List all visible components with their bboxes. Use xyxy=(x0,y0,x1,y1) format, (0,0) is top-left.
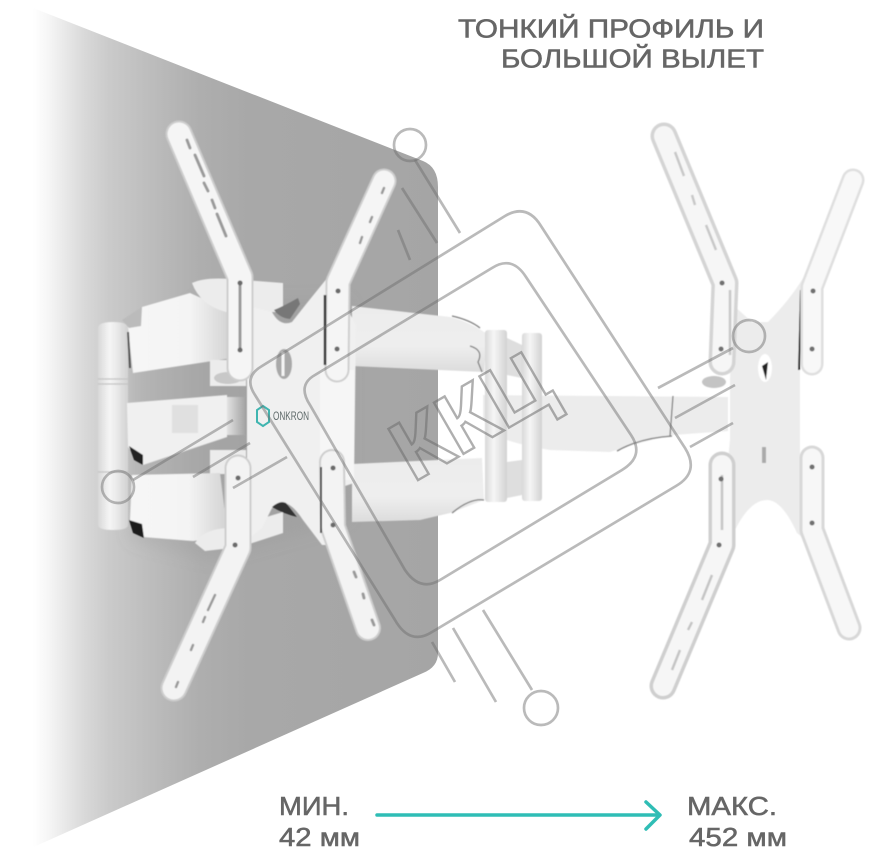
wall panel xyxy=(0,0,438,856)
upper right bracket face xyxy=(337,181,384,370)
lower right bracket face right xyxy=(812,458,849,628)
upper left slots right xyxy=(675,152,730,355)
upper folded segment xyxy=(128,293,232,373)
upper left bracket slots xyxy=(187,140,240,350)
lower left bracket face right xyxy=(663,465,722,686)
arrow: min to max xyxy=(377,802,660,829)
metal joint xyxy=(227,397,248,435)
lower right bracket face xyxy=(332,462,368,628)
lower right bracket holes xyxy=(354,572,374,625)
right wall plate xyxy=(727,275,812,542)
upper left bracket face xyxy=(179,134,240,368)
middle folded segment xyxy=(127,395,227,465)
right plate lower fold edge xyxy=(801,460,802,525)
stamp outer frame xyxy=(250,211,691,637)
minimum label xyxy=(279,791,360,852)
right plate screw xyxy=(762,447,766,463)
upper right bracket dark edge xyxy=(324,295,326,365)
swivel support upper xyxy=(210,360,246,386)
upper segment recess xyxy=(122,307,142,328)
middle segment dark recess xyxy=(129,446,143,465)
upper segment dark edge xyxy=(128,332,130,368)
swivel support lower xyxy=(210,450,246,474)
plate slot bottom xyxy=(272,502,297,517)
left mount bolts xyxy=(235,283,338,545)
pin left xyxy=(102,420,287,503)
lower swivel block xyxy=(195,512,283,551)
extended upper arm xyxy=(352,306,487,372)
logo wordmark: ONKRON xyxy=(273,409,309,423)
upper swivel block xyxy=(192,278,283,312)
plate center hole xyxy=(276,349,292,379)
lower segment dark recess xyxy=(129,520,144,538)
title line 1: ТОНКИЙ ПРОФИЛЬ И xyxy=(458,14,764,44)
central extended arm xyxy=(483,395,728,452)
pole connector xyxy=(507,338,522,498)
lower folded segment xyxy=(130,473,228,541)
swivel bolts xyxy=(214,372,242,384)
right mount bolts xyxy=(719,283,813,545)
pole bands xyxy=(98,379,128,472)
min caption: МИН. xyxy=(279,791,349,821)
upper right bracket face right xyxy=(812,180,853,364)
hole highlight xyxy=(282,352,284,376)
max value: 452 мм xyxy=(689,822,787,852)
wall plate xyxy=(245,277,356,545)
upper right bracket right xyxy=(812,180,853,364)
middle segment label patch xyxy=(172,405,198,433)
right plate fold edge xyxy=(799,290,801,370)
vertical pole xyxy=(98,322,128,530)
stamp letters: ККЦ xyxy=(374,332,568,499)
watermark stamp xyxy=(102,129,765,725)
plate right fold xyxy=(320,370,354,480)
lower left bracket slots xyxy=(176,595,215,687)
lower left slots right xyxy=(672,475,722,670)
pin bottom xyxy=(432,610,558,725)
lower left bracket xyxy=(174,468,238,688)
lower right bracket right xyxy=(812,458,849,628)
min value: 42 мм xyxy=(279,822,360,852)
upper left bracket xyxy=(179,134,240,368)
upper right bracket slots xyxy=(360,188,384,243)
pole A xyxy=(485,330,507,502)
right plate hole xyxy=(758,354,772,382)
arm seams xyxy=(452,316,673,513)
right plate hole shadow xyxy=(762,362,768,380)
lower left bracket face xyxy=(174,468,238,688)
max caption: МАКС. xyxy=(687,791,777,821)
pin top xyxy=(394,129,460,260)
shadow behind mount xyxy=(130,300,350,560)
title line 2: БОЛЬШОЙ ВЫЛЕТ xyxy=(501,44,764,74)
title xyxy=(458,14,764,74)
right swivel bolts xyxy=(702,376,726,388)
stamp inner frame xyxy=(305,263,636,584)
lower left bracket right xyxy=(663,465,722,686)
logo hexagon xyxy=(257,406,269,426)
upper right bracket xyxy=(337,181,384,370)
pole B xyxy=(522,333,542,501)
upper left bracket right xyxy=(664,136,725,362)
lower right bracket dark edge xyxy=(320,467,322,533)
upper left bracket face right xyxy=(664,136,725,362)
left mount: folded arm on wall xyxy=(98,134,728,688)
maximum label xyxy=(687,791,787,852)
extended lower arm xyxy=(352,458,484,522)
plate slot top xyxy=(274,298,300,319)
pin right xyxy=(658,320,765,447)
lower right bracket xyxy=(332,462,368,628)
brand logo xyxy=(257,406,309,426)
right mount: extended position xyxy=(663,136,853,686)
